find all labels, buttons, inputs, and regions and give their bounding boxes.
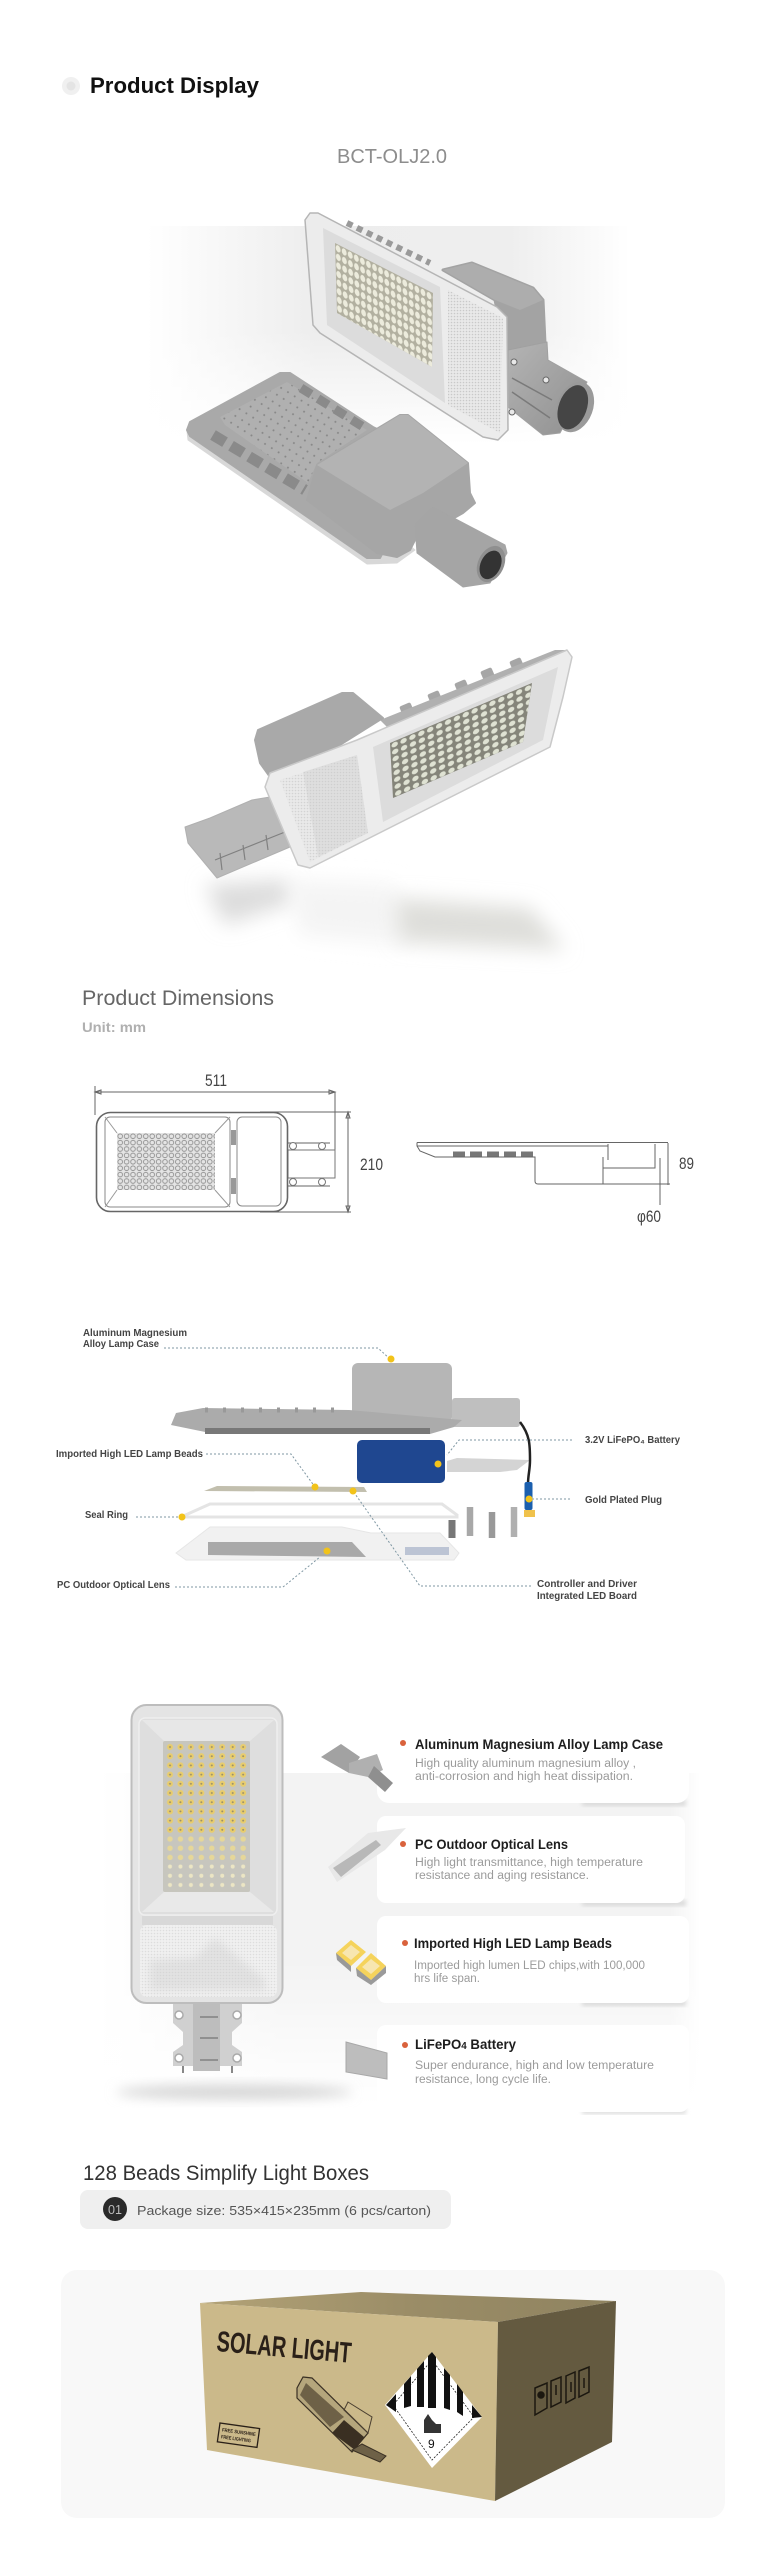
drawing: side dimension view (417, 1142, 694, 1226)
card: LiFePO4 battery (346, 2025, 689, 2114)
lamp outline (96, 1112, 288, 1212)
hazard class 9 diamond: 9 (428, 2437, 435, 2451)
callout: lamp case: Aluminum Magnesium (83, 1328, 187, 1339)
part: screws (452, 1507, 514, 1538)
icon: lens (328, 1828, 406, 1882)
product image: lamp front full view (116, 1705, 352, 2099)
heading: Product Dimensions: Product Dimensions (82, 987, 274, 1010)
panel: feature backdrop (100, 1773, 700, 2105)
product image: lamp front view (305, 213, 601, 440)
heat sink ribs (347, 223, 430, 263)
card: optical lens (328, 1816, 686, 1906)
tagline stamp: FREE SUNSHINE (222, 2427, 257, 2438)
mounting bracket (508, 342, 587, 435)
unit label: Unit: mm (82, 1019, 146, 1035)
LED grid (117, 1133, 215, 1190)
part: seal ring (181, 1504, 457, 1517)
handling marks (535, 2367, 589, 2415)
front face (200, 2303, 498, 2501)
box lamp drawing (297, 2377, 386, 2462)
callout: seal ring (85, 1510, 186, 1521)
card: optical lens: resistance and aging resistance. (415, 1870, 589, 1882)
back plate (187, 373, 400, 558)
card: LED beads: hrs life span. (414, 1973, 480, 1985)
icon: battery (346, 2042, 387, 2079)
callout: controller (350, 1488, 637, 1602)
callout: lamp case (83, 1328, 394, 1362)
product image: lamp angled view (185, 650, 572, 950)
callout: controller: Controller and Driver (537, 1579, 637, 1590)
cast shadow (205, 880, 565, 950)
part: lens (176, 1527, 459, 1560)
part: LED strip (204, 1486, 367, 1492)
card: optical lens: PC Outdoor Optical Lens (415, 1837, 568, 1852)
icon: small lamp (321, 1744, 393, 1792)
height value: 89 (679, 1154, 694, 1173)
lens section (448, 290, 503, 433)
part: battery (357, 1440, 445, 1483)
callout: plug (526, 1495, 662, 1506)
drawing: top dimension view (95, 1071, 383, 1212)
inner reflector (373, 667, 558, 822)
heat sink ribs (399, 657, 524, 716)
band under reflector (142, 1916, 273, 1925)
battery box (307, 415, 475, 557)
title: Product Display: Product Display (90, 73, 260, 98)
package size pill: Package size: 535×415×235mm (6 pcs/carton) (137, 2203, 431, 2218)
battery box (255, 693, 383, 777)
part: controller bracket (447, 1458, 530, 1472)
bracket (173, 2003, 242, 2073)
top edge (380, 650, 572, 735)
card: lamp case: High quality aluminum magnesium alloy , (415, 1758, 636, 1770)
icon: section marker (62, 77, 80, 95)
side face (495, 2301, 616, 2501)
callout: battery (434, 1435, 680, 1468)
callout: LED beads (56, 1449, 318, 1490)
reflector (139, 1718, 277, 1915)
product image: lamp back view (187, 373, 511, 587)
callout: lens (57, 1548, 330, 1591)
tagline stamp (217, 2423, 260, 2447)
card: lamp case: Aluminum Magnesium Alloy Lamp Case (415, 1737, 663, 1752)
mounting bracket (415, 507, 507, 587)
card: optical lens: High light transmittance, high temperature (415, 1857, 643, 1869)
LED panel (163, 1741, 250, 1892)
card: LED beads (336, 1916, 689, 2006)
floor shadow (116, 2085, 352, 2099)
panel: gradient backdrop behind lamps (147, 226, 630, 444)
mounting bracket (185, 797, 290, 878)
card: lamp case: anti-corrosion and high heat dissipation. (415, 1771, 633, 1783)
tagline stamp: FREE LIGHTING (221, 2434, 251, 2444)
callout: controller: Integrated LED Board (537, 1591, 637, 1602)
card: LED beads: Imported High LED Lamp Beads (414, 1936, 612, 1951)
top face (200, 2292, 616, 2322)
package size pill: 01 (108, 2202, 122, 2217)
callout: battery: 3.2V LiFePO₄ Battery (585, 1435, 680, 1446)
part: cable (520, 1422, 530, 1484)
callout: LED beads: Imported High LED Lamp Beads (56, 1449, 203, 1460)
LED panel (390, 683, 532, 798)
card: LED beads: Imported high lumen LED chips,with 100,000 (414, 1960, 645, 1972)
lamp frame (265, 650, 572, 868)
card: lamp case (321, 1730, 689, 1806)
diagram: exploded lamp (56, 1328, 680, 1602)
hazard class 9 diamond (385, 2352, 482, 2468)
height dimension line (260, 1112, 351, 1212)
card: LiFePO4 battery: resistance, long cycle life. (415, 2074, 551, 2086)
lens section (140, 1925, 277, 1997)
part: plug (524, 1482, 532, 1510)
box title: SOLAR LIGHT (215, 2326, 353, 2370)
heading: packaging: 128 Beads Simplify Light Boxes (83, 2162, 369, 2185)
carton illustration (200, 2292, 616, 2501)
lens section (280, 755, 368, 862)
LED panel (335, 243, 433, 367)
card: LiFePO4 battery: LiFePO4 Battery (415, 2037, 516, 2052)
card: LiFePO4 battery: Super endurance, high and low temperature (415, 2060, 654, 2072)
pole diameter value: φ60 (637, 1207, 661, 1226)
bracket (288, 1142, 335, 1186)
callout: plug: Gold Plated Plug (585, 1495, 662, 1506)
package size pill (80, 2190, 451, 2229)
panel: carton backdrop (61, 2270, 725, 2518)
model name: BCT-OLJ2.0 (337, 146, 447, 168)
height value: 210 (360, 1155, 383, 1174)
lower edge (187, 431, 415, 564)
callout: lamp case: Alloy Lamp Case (83, 1339, 159, 1350)
frame (132, 1705, 282, 2003)
pole tube opening (549, 376, 601, 438)
pole tube opening (471, 541, 511, 587)
lamp frame (305, 213, 508, 440)
callout: lens: PC Outdoor Optical Lens (57, 1580, 170, 1591)
callout: seal ring: Seal Ring (85, 1510, 128, 1521)
battery box (443, 263, 545, 357)
width dimension line (95, 1086, 335, 1178)
inner reflector (323, 228, 445, 403)
width value: 511 (205, 1071, 227, 1090)
dotted plate (220, 382, 367, 483)
fins (453, 1152, 533, 1156)
part: lamp case (171, 1363, 520, 1434)
icon: LED chips (336, 1940, 386, 1985)
fins (213, 435, 305, 490)
